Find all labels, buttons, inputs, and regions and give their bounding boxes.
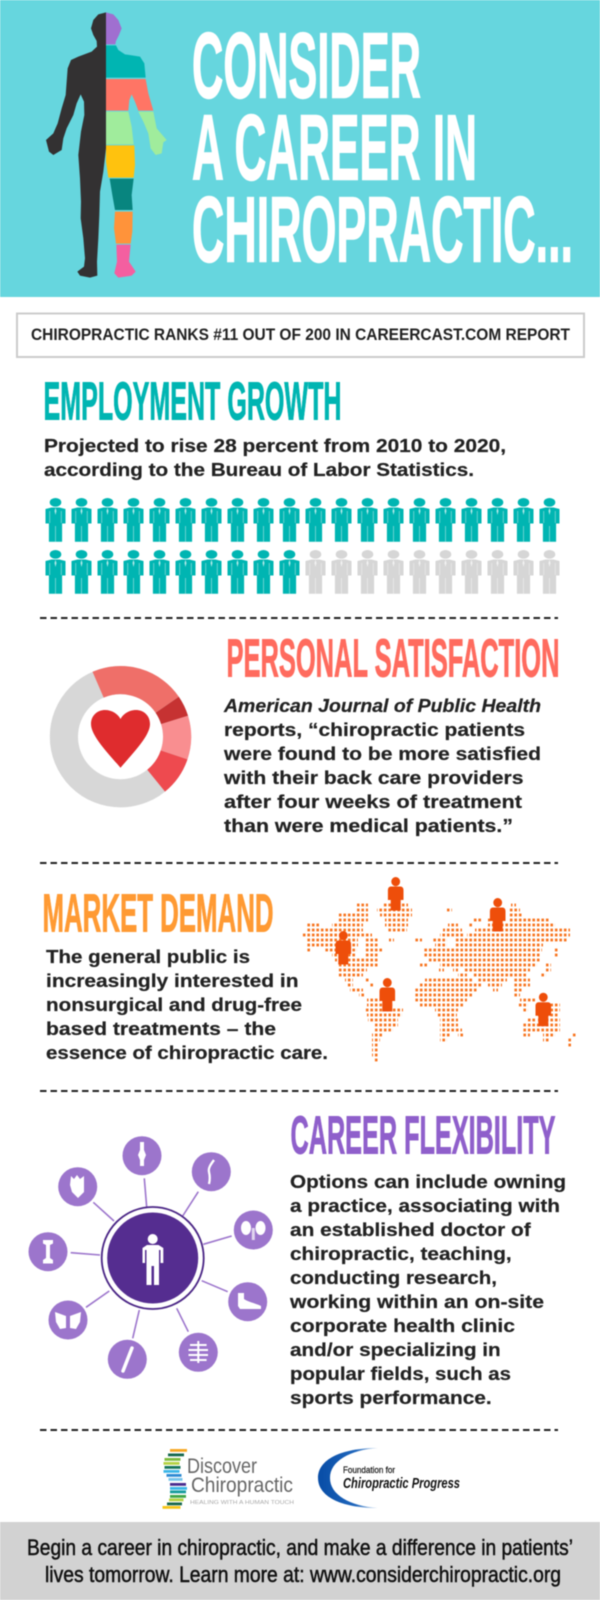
text block: market demand: essence of chiropractic care. xyxy=(46,1042,328,1063)
text block: employment growth: Projected to rise 28 percent from 2010 to 2020, xyxy=(44,435,506,456)
callout: ranking box xyxy=(17,314,584,357)
pictogram: 30 of 40 teal people xyxy=(46,498,560,594)
text block: market demand: increasingly interested in xyxy=(46,970,298,991)
logo: Discover Chiropractic: Chiropractic xyxy=(191,1474,293,1497)
text block: personal satisfaction: reports, “chiropractic patients xyxy=(224,719,525,740)
text block: market demand: based treatments – the xyxy=(46,1018,276,1039)
panel: employment growth xyxy=(44,372,560,594)
chart: dotted world map with people xyxy=(302,877,577,1062)
text block: personal satisfaction xyxy=(223,695,541,836)
text block: personal satisfaction: than were medical patients.” xyxy=(224,815,513,836)
text block: personal satisfaction: were found to be more satisfied xyxy=(223,743,541,764)
panel: header banner xyxy=(0,0,600,297)
logo: Foundation for Chiropractic Progress: Foundation for xyxy=(343,1465,395,1476)
text block: career flexibility: and/or specializing in xyxy=(290,1339,501,1360)
text block: career flexibility: chiropractic, teaching, xyxy=(290,1243,512,1264)
text block: market demand: The general public is xyxy=(46,946,250,967)
text block: employment growth: according to the Bureau of Labor Statistics. xyxy=(44,459,474,480)
logo: Discover Chiropractic: HEALING WITH A HUMAN TOUCH xyxy=(190,1500,294,1506)
icon: anatomical heart xyxy=(58,1167,97,1206)
text block: personal satisfaction: after four weeks of treatment xyxy=(224,791,522,812)
icon: rib cage xyxy=(179,1333,218,1372)
text block: career flexibility: an established doctor of xyxy=(290,1219,532,1240)
icon: knee xyxy=(122,1136,162,1175)
text block: career flexibility: Options can include owning xyxy=(290,1171,566,1192)
logo: Discover Chiropractic: Discover xyxy=(187,1455,257,1478)
text block: market demand xyxy=(46,946,328,1063)
text block: market demand: nonsurgical and drug-free xyxy=(46,994,302,1015)
text block: personal satisfaction: with their back care providers xyxy=(223,767,524,788)
text block: career flexibility: a practice, associating with xyxy=(290,1195,560,1216)
icon: heart xyxy=(91,710,150,768)
text block: career flexibility: popular fields, such as xyxy=(290,1363,511,1384)
panel: market demand: MARKET DEMAND xyxy=(42,884,274,944)
panel: footer call to action xyxy=(0,1522,600,1600)
text block: personal satisfaction: American Journal of Public Health xyxy=(223,695,541,716)
icon: human body silhouette split into coloured bands xyxy=(46,12,167,278)
icon: central person hub xyxy=(102,1207,204,1309)
text block: career flexibility: corporate health clinic xyxy=(290,1315,515,1336)
icon: pelvis xyxy=(48,1300,88,1340)
panel: personal satisfaction xyxy=(42,628,559,836)
diagram: body-system hub and spokes xyxy=(28,1136,273,1379)
title xyxy=(192,14,573,282)
icon: long bone xyxy=(108,1340,147,1379)
panel: career flexibility xyxy=(28,1106,566,1408)
logo: Discover Chiropractic xyxy=(162,1449,294,1509)
icon: kidneys xyxy=(234,1210,273,1250)
icon: foot xyxy=(228,1282,267,1321)
text block: employment growth xyxy=(44,435,506,480)
callout: ranking box: CHIROPRACTIC RANKS #11 OUT OF 200 IN CAREERCAST.COM REPORT xyxy=(31,326,570,344)
logo: Foundation for Chiropractic Progress xyxy=(318,1448,460,1508)
icon: spine xyxy=(192,1152,231,1191)
panel: market demand xyxy=(42,877,577,1063)
text block: career flexibility: conducting research, xyxy=(290,1267,497,1288)
logo: Foundation for Chiropractic Progress: Chiropractic Progress xyxy=(343,1476,460,1492)
icon: femur bone xyxy=(28,1232,68,1271)
text block: career flexibility xyxy=(289,1171,566,1408)
text block: career flexibility: sports performance. xyxy=(290,1387,492,1408)
text block: career flexibility: working within an on-site xyxy=(289,1291,544,1312)
chart: donut with heart xyxy=(42,658,199,815)
